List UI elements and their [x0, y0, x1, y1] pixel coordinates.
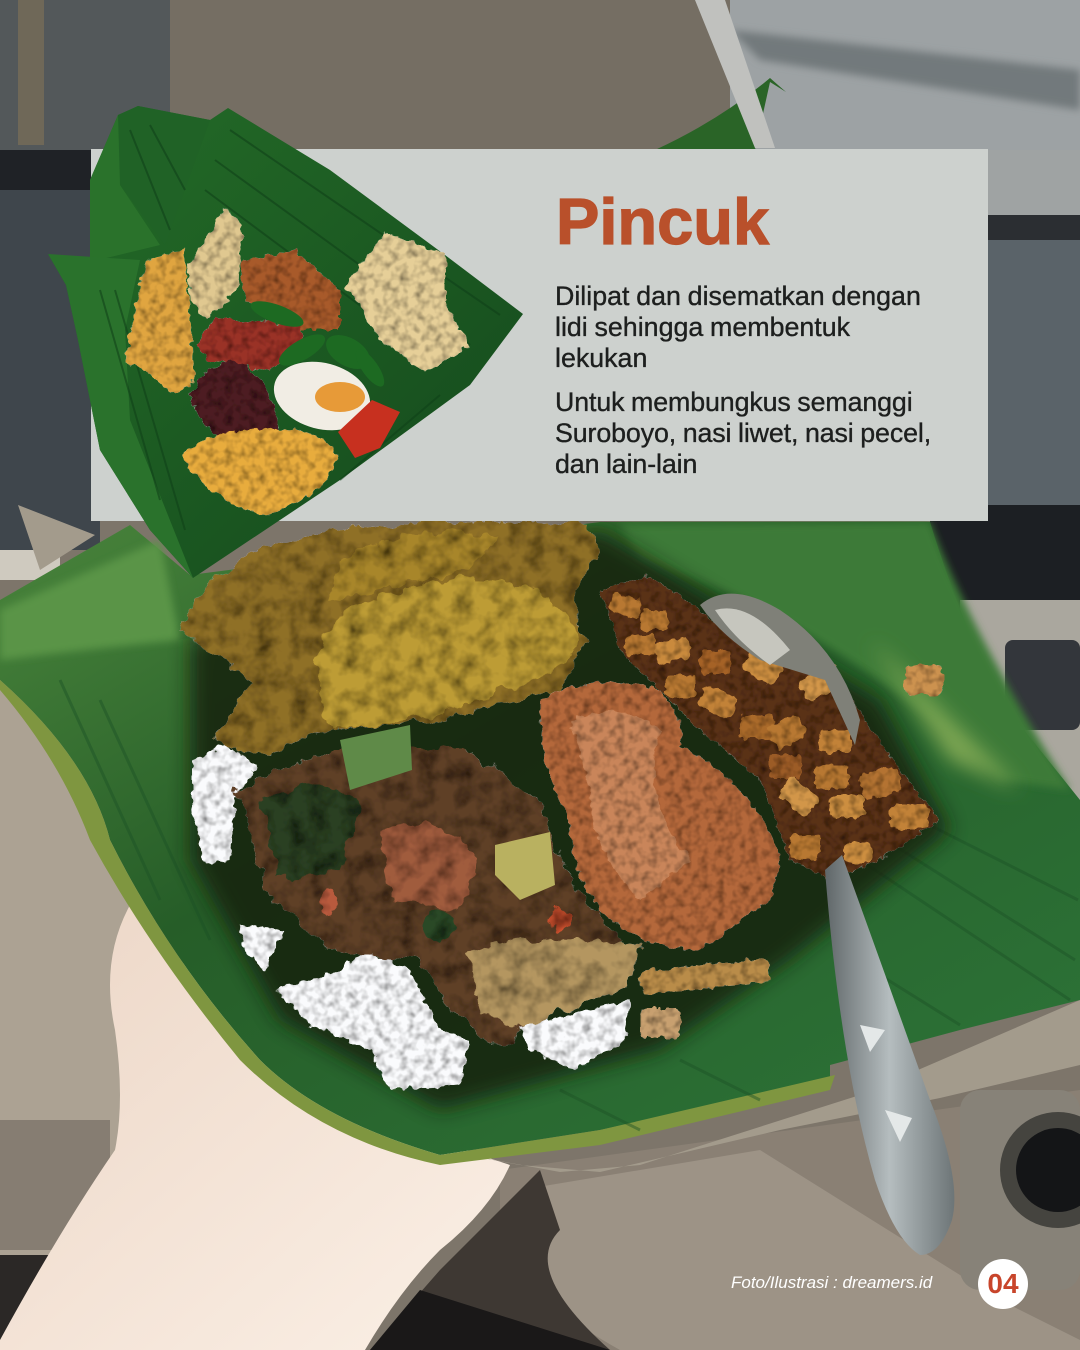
green vegetable slice [340, 725, 412, 790]
vegetable chunks [495, 832, 555, 900]
cardboard under leaf [18, 505, 1080, 1172]
chips and fritters [125, 208, 470, 515]
text block: usage description [555, 387, 931, 479]
hand holding leaf [0, 905, 510, 1350]
sambal [338, 400, 400, 458]
folded leaf body [48, 106, 523, 578]
panel: grey text card [91, 149, 988, 521]
text block: shape description: Dilipat dan disematkan dengan [555, 281, 921, 311]
title: Pincuk [556, 185, 769, 258]
rice [192, 745, 630, 1090]
spoon [700, 594, 954, 1255]
fried tofu [540, 682, 780, 950]
top leaf peeking behind panel [655, 78, 786, 150]
text block: shape description: lekukan [555, 343, 647, 373]
boiled egg [266, 351, 378, 441]
fritters [180, 522, 597, 755]
vegetable salad with sauce [235, 750, 640, 1050]
page number badge [978, 1259, 1028, 1309]
shadow under food [190, 530, 950, 1110]
text block: usage description: Untuk membungkus semanggi [555, 387, 913, 417]
photo credit: Foto/Ilustrasi : dreamers.id [731, 1273, 932, 1292]
tempeh pieces [600, 575, 943, 1038]
text block: usage description: dan lain-lain [555, 449, 697, 479]
page number badge: 04 [987, 1268, 1019, 1299]
banana leaf [0, 522, 1080, 1165]
text block: usage description: Suroboyo, nasi liwet, nasi pecel, [555, 418, 931, 448]
green herb [248, 296, 389, 391]
text block: shape description: lidi sehingga membentuk [555, 312, 850, 342]
text block: shape description [555, 281, 921, 373]
